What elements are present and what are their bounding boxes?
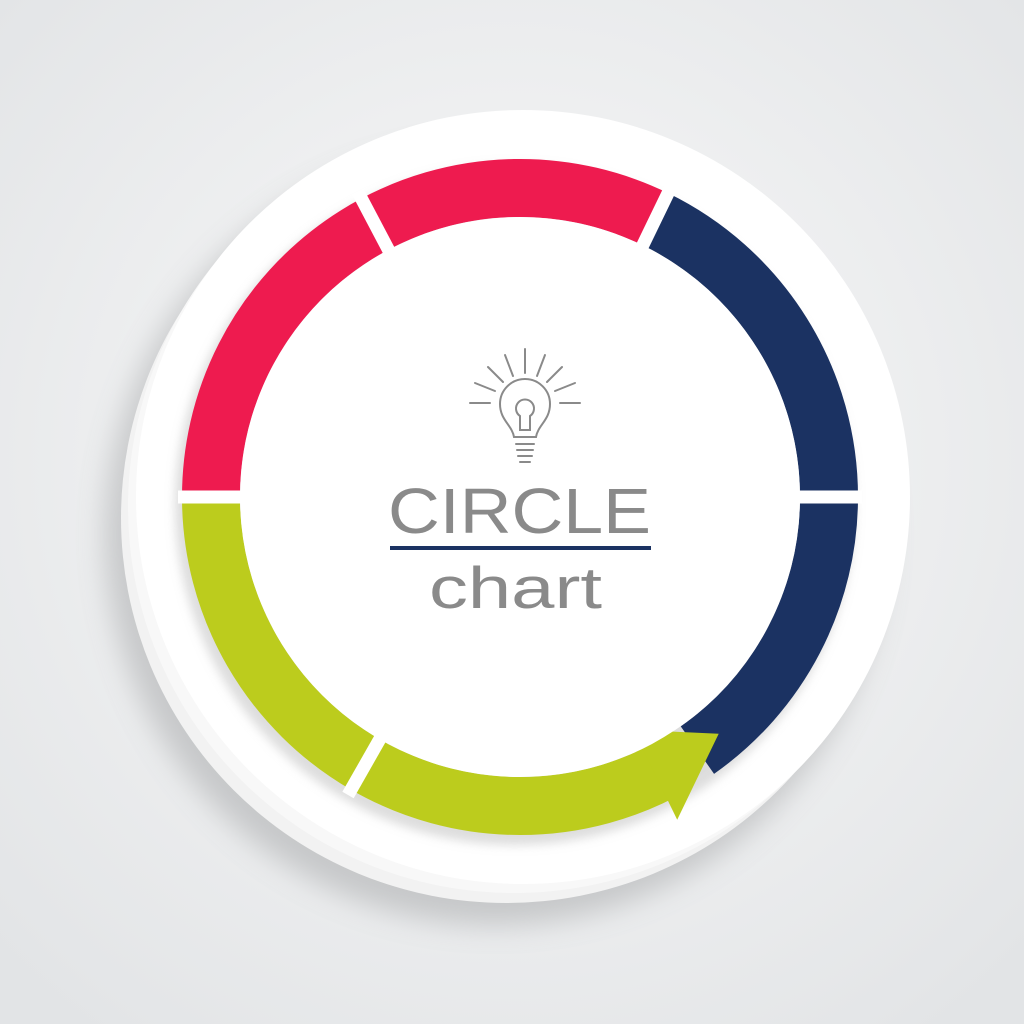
segment: navy xyxy=(655,219,829,750)
ring chart xyxy=(211,188,829,806)
ring shadow xyxy=(175,165,855,845)
gaps xyxy=(178,187,862,795)
arrow head xyxy=(633,730,719,820)
divider line xyxy=(390,546,651,550)
segment: red xyxy=(211,188,655,497)
title: CIRCLE: CIRCLE xyxy=(388,475,651,547)
segment: green arrow body xyxy=(211,497,674,806)
subtitle: chart: chart xyxy=(429,556,602,621)
disc shadow layers xyxy=(105,121,900,925)
inner white circle xyxy=(240,217,800,777)
outer white disc xyxy=(136,110,910,884)
icon: light bulb xyxy=(470,349,580,462)
